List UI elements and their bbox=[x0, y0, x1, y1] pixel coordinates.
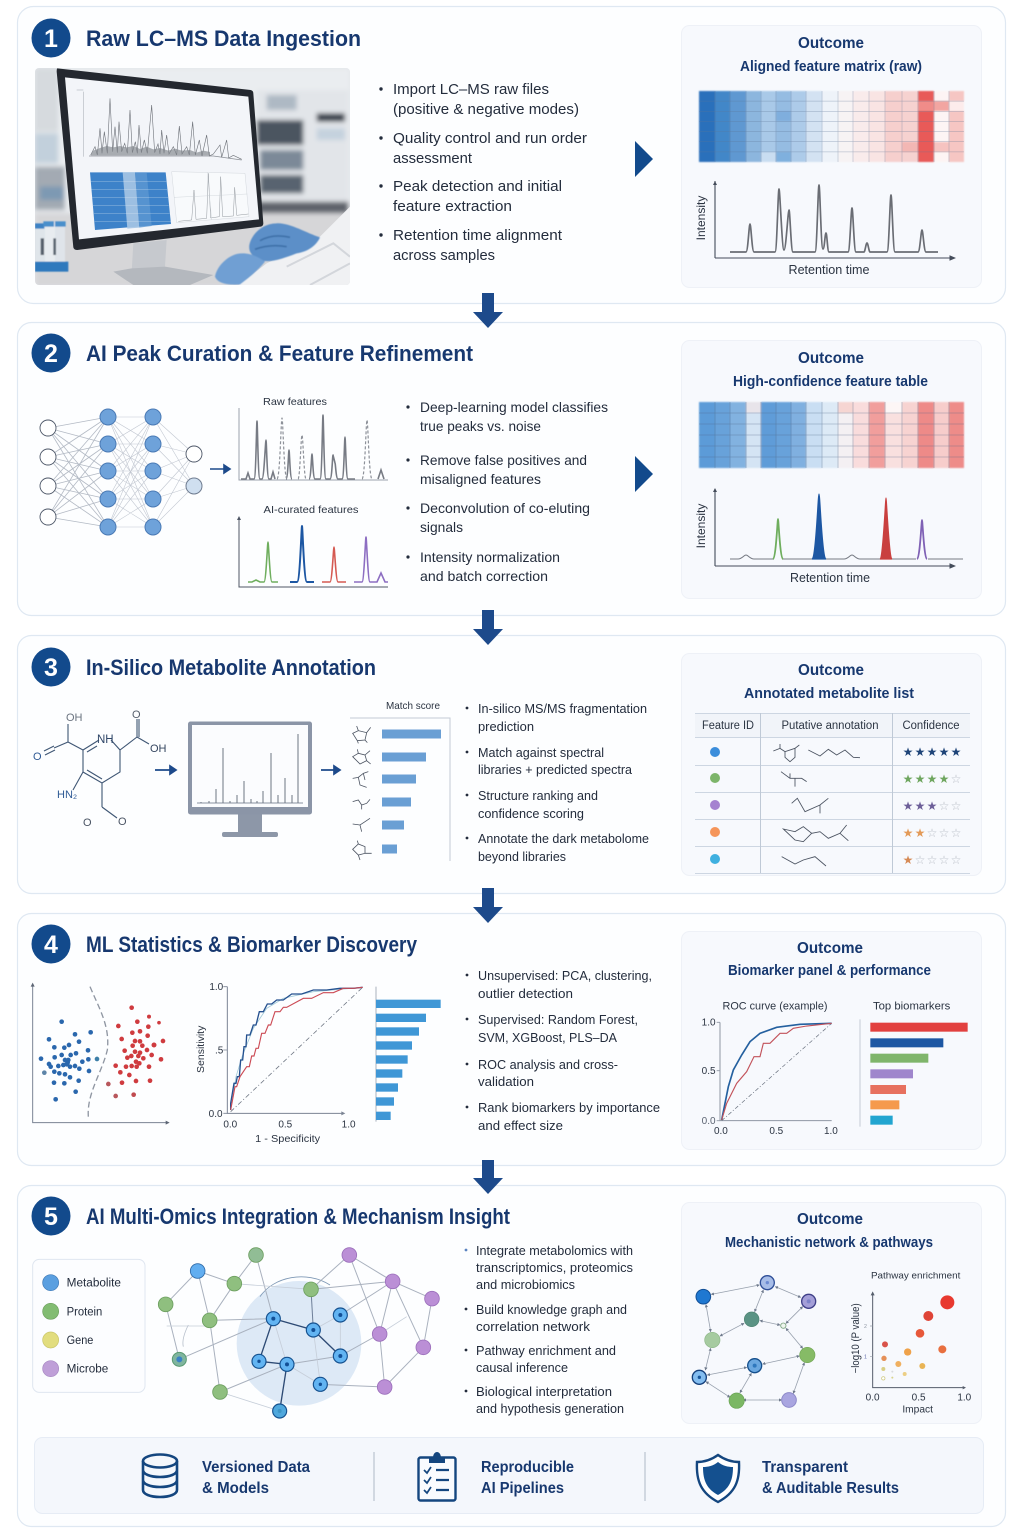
icon: monitor with spectrum bbox=[188, 722, 312, 837]
step number 3 bbox=[32, 648, 70, 686]
chart: ROC curve: 0.0 bbox=[223, 1120, 238, 1131]
chart: match score ranking bbox=[350, 700, 450, 861]
chart: ROC example: 0.0 bbox=[714, 1126, 728, 1137]
chart: ROC example: 1.0 bbox=[702, 1018, 716, 1029]
bullet list: step 4: and effect size bbox=[478, 1119, 563, 1133]
panel: outcome 1 bbox=[682, 26, 982, 288]
legend: node types: Protein bbox=[67, 1304, 102, 1318]
axis label: Intensity bbox=[694, 504, 708, 548]
bullet list: step 5 bbox=[465, 1244, 633, 1416]
chart: AI-curated features bbox=[237, 504, 388, 587]
arrow: to outcome 2 bbox=[635, 456, 653, 492]
legend: node types: Gene bbox=[67, 1333, 94, 1347]
arrow: step 1 to 2 bbox=[473, 293, 503, 328]
chart: pathway enrichment: 1.0 bbox=[957, 1393, 972, 1404]
panel: outcome 4 bbox=[682, 932, 982, 1150]
outcome heading: Outcome bbox=[797, 1211, 863, 1228]
panel: outcome 5 bbox=[682, 1202, 982, 1424]
table: annotated metabolites: ☆☆☆☆ bbox=[915, 853, 961, 867]
chart: raw features: Raw features bbox=[263, 396, 327, 408]
label: versioned data bbox=[202, 1459, 310, 1497]
table: annotated metabolites: ★★★★ bbox=[903, 772, 949, 786]
bullet list: step 3: beyond libraries bbox=[478, 850, 566, 864]
chart: ROC curve: 1.0 bbox=[209, 982, 224, 993]
bullet list: step 2: Deep-learning model classifies bbox=[420, 399, 608, 415]
arrow: step 3 to 4 bbox=[473, 888, 503, 923]
bullet list: step 4: Supervised: Random Forest, bbox=[478, 1013, 638, 1027]
bullet list: step 4: SVM, XGBoost, PLS–DA bbox=[478, 1031, 618, 1045]
diagram: molecule structure: NH bbox=[97, 734, 114, 746]
bullet list: step 1: Import LC–MS raw files bbox=[393, 82, 549, 98]
bullet list: step 2: Remove false positives and bbox=[420, 452, 587, 468]
chart: ROC example: 0.5 bbox=[702, 1066, 716, 1077]
outcome subheading: Aligned feature matrix (raw) bbox=[740, 59, 922, 75]
bullet list: step 2: true peaks vs. noise bbox=[420, 418, 541, 434]
chart: pathway enrichment: 1 bbox=[864, 1355, 867, 1361]
bullet list: step 2: signals bbox=[420, 519, 463, 535]
outcome subheading: Mechanistic network & pathways bbox=[725, 1235, 933, 1251]
chart: ROC example: 0.0 bbox=[702, 1116, 716, 1127]
arrow: to outcome 1 bbox=[635, 141, 653, 177]
icon: database bbox=[143, 1454, 177, 1497]
bullet list: step 5: transcriptomics, proteomics bbox=[476, 1261, 633, 1275]
bullet list: step 5: Pathway enrichment and bbox=[476, 1344, 616, 1358]
arrow: network to features bbox=[210, 465, 230, 473]
bullet list: step 4: ROC analysis and cross- bbox=[478, 1058, 618, 1072]
chart: AI-curated features: AI-curated features bbox=[264, 504, 358, 516]
chart: top biomarkers: Top biomarkers bbox=[873, 1000, 950, 1012]
axis label: Retention time bbox=[790, 571, 870, 585]
chart: PCA scatter bbox=[31, 983, 170, 1125]
heading: step 3: In-Silico Metabolite Annotation bbox=[86, 655, 376, 680]
panel: outcome 3 bbox=[682, 654, 982, 876]
outcome subheading: Biomarker panel & performance bbox=[728, 963, 931, 979]
screen bbox=[65, 77, 259, 239]
bullet list: step 5: Integrate metabolomics with bbox=[476, 1244, 633, 1258]
bullet list: step 5: Build knowledge graph and bbox=[476, 1303, 627, 1317]
step number 5 bbox=[32, 1196, 70, 1236]
bullet list: step 1: Peak detection and initial bbox=[393, 179, 562, 195]
coat bbox=[238, 207, 350, 285]
step number 2: 2 bbox=[44, 340, 58, 368]
table: annotated metabolites: Confidence bbox=[902, 720, 960, 732]
panel: step 4 ML statistics bbox=[18, 914, 1006, 1166]
bullet list: step 2: misaligned features bbox=[420, 471, 541, 487]
table: annotated metabolites: ☆☆ bbox=[939, 799, 961, 813]
bullet list: step 3: Annotate the dark metabolome bbox=[478, 832, 649, 846]
arrow: step 4 to 5 bbox=[473, 1160, 503, 1194]
illustration: scientist at monitor in lab bbox=[35, 68, 350, 287]
table: annotated metabolites: Putative annotation bbox=[782, 720, 878, 732]
step number 1: 1 bbox=[44, 25, 58, 53]
outcome heading: Outcome bbox=[798, 662, 864, 679]
bullet list: step 3: confidence scoring bbox=[478, 807, 584, 821]
bullet list: step 4 bbox=[466, 969, 660, 1133]
chart: pathway enrichment: 2 bbox=[864, 1324, 867, 1330]
chart: top biomarkers bbox=[860, 1000, 968, 1127]
chart: curated chromatogram bbox=[694, 488, 963, 585]
bullet list: step 2 bbox=[406, 399, 608, 584]
arrow: monitor to ranking bbox=[321, 766, 340, 774]
chart: match score ranking: Match score bbox=[386, 700, 440, 712]
diagram: mechanistic network bbox=[692, 1276, 816, 1408]
bullet list: step 3: Structure ranking and bbox=[478, 789, 598, 803]
step number 5: 5 bbox=[44, 1203, 58, 1231]
outcome subheading: High-confidence feature table bbox=[733, 374, 928, 390]
diagram: molecule structure: HN₂ bbox=[57, 789, 77, 801]
heading: step 2: AI Peak Curation & Feature Refinement bbox=[86, 341, 474, 366]
screen heatmap bbox=[90, 172, 171, 230]
diagram: multi-omics network bbox=[158, 1248, 439, 1418]
bullet list: step 1: feature extraction bbox=[393, 199, 512, 215]
bullet list: step 1: Retention time alignment bbox=[393, 228, 562, 244]
panel: step 5 multi-omics bbox=[18, 1186, 1006, 1526]
bullet list: step 3: In-silico MS/MS fragmentation bbox=[478, 702, 647, 716]
chart: ROC curve bbox=[196, 982, 363, 1145]
outcome heading: Outcome bbox=[797, 940, 863, 957]
bezel bbox=[57, 68, 263, 250]
label: reproducible pipelines: Reproducible bbox=[481, 1459, 574, 1476]
chart: biomarker importance bars bbox=[376, 987, 441, 1122]
label: transparent results: & Auditable Results bbox=[762, 1480, 899, 1497]
bullet list: step 1: across samples bbox=[393, 248, 495, 264]
chart: ROC curve: 0.0 bbox=[209, 1109, 223, 1120]
panel: step 3 annotation bbox=[18, 636, 1006, 894]
bullet list: step 5: causal inference bbox=[476, 1361, 568, 1375]
heatmap: feature table bbox=[699, 402, 964, 468]
label: transparent results: Transparent bbox=[762, 1459, 848, 1476]
bullet list: step 1: assessment bbox=[393, 151, 472, 167]
chart: pathway enrichment: 0.0 bbox=[866, 1393, 880, 1404]
label: versioned data: & Models bbox=[202, 1480, 269, 1497]
label: reproducible pipelines bbox=[481, 1459, 574, 1497]
mini structures bbox=[353, 726, 372, 860]
label: reproducible pipelines: AI Pipelines bbox=[481, 1480, 564, 1497]
panel: step 2 peak curation bbox=[18, 322, 1006, 616]
diagram: molecule structure bbox=[33, 709, 167, 829]
diagram: neural network bbox=[40, 409, 202, 535]
diagram: molecule structure: O bbox=[33, 751, 42, 763]
heatmap: aligned feature matrix bbox=[699, 91, 964, 162]
bullet list: step 3: prediction bbox=[478, 720, 534, 734]
bullet list: step 2: Intensity normalization bbox=[420, 549, 560, 565]
chart: pathway enrichment: 0.5 bbox=[912, 1393, 926, 1404]
table: annotated metabolites: ☆☆☆ bbox=[927, 826, 961, 840]
chart: pathway enrichment: Impact bbox=[902, 1405, 933, 1416]
chart: ROC curve: 0.5 bbox=[278, 1120, 293, 1131]
outcome heading: Outcome bbox=[798, 350, 864, 367]
panel: footer principles bbox=[34, 1438, 984, 1514]
bullet list: step 2: and batch correction bbox=[420, 568, 548, 584]
step number 4 bbox=[32, 924, 70, 964]
chart: ROC example bbox=[702, 1000, 838, 1137]
bullet list: step 4: outlier detection bbox=[478, 987, 573, 1001]
step number 3: 3 bbox=[44, 654, 58, 682]
diagram: molecule structure: O bbox=[83, 817, 92, 829]
axis label: Intensity bbox=[694, 196, 708, 240]
stand bbox=[132, 240, 166, 268]
screen line chart bbox=[172, 172, 249, 223]
step number 4: 4 bbox=[44, 931, 58, 959]
axis label: Retention time bbox=[788, 263, 870, 277]
chart: ROC example: 0.5 bbox=[769, 1126, 784, 1137]
chart: ROC curve: Sensitivity bbox=[196, 1025, 207, 1073]
step number 2 bbox=[32, 334, 70, 372]
bullet list: step 5: Biological interpretation bbox=[476, 1385, 612, 1399]
bullet list: step 4: validation bbox=[478, 1075, 534, 1089]
spectrum bbox=[89, 156, 242, 160]
bullet list: step 3: libraries + predicted spectra bbox=[478, 763, 632, 777]
chart: ROC curve: .5 bbox=[215, 1045, 224, 1056]
table: annotated metabolites bbox=[695, 713, 970, 874]
step number 1 bbox=[32, 18, 70, 58]
heading: step 1: Raw LC–MS Data Ingestion bbox=[86, 26, 361, 51]
table: annotated metabolites: ★★★★★ bbox=[903, 745, 961, 759]
table: annotated metabolites: ☆ bbox=[951, 772, 961, 786]
table: annotated metabolites: ★ bbox=[903, 853, 913, 867]
chart: raw chromatogram bbox=[694, 181, 955, 277]
bullet list: step 5: and hypothesis generation bbox=[476, 1402, 624, 1416]
bullet list: step 3: Match against spectral bbox=[478, 746, 604, 760]
chart: ROC curve: 1 - Specificity bbox=[255, 1134, 321, 1145]
label: transparent results bbox=[762, 1459, 899, 1497]
arrow: molecule to monitor bbox=[155, 766, 176, 774]
legend: node types bbox=[33, 1259, 145, 1392]
diagram: molecule structure: OH bbox=[150, 743, 167, 755]
arrow: step 2 to 3 bbox=[473, 610, 503, 645]
chart: pathway enrichment bbox=[850, 1270, 972, 1416]
icon: shield bbox=[697, 1455, 739, 1502]
table: annotated metabolites: ★★★ bbox=[903, 799, 937, 813]
legend: node types: Microbe bbox=[67, 1362, 109, 1376]
diagram: molecule structure: O bbox=[118, 816, 127, 828]
chart: pathway enrichment: −log10 (P value) bbox=[850, 1303, 862, 1373]
legend: node types: Metabolite bbox=[67, 1276, 121, 1290]
bullet list: step 5: and microbiomics bbox=[476, 1278, 575, 1292]
bullet list: step 4: Unsupervised: PCA, clustering, bbox=[478, 969, 652, 983]
gloves bbox=[215, 223, 320, 285]
diagram: molecule structure: OH bbox=[66, 712, 83, 724]
outcome heading: Outcome bbox=[798, 35, 864, 52]
chart: ROC example: ROC curve (example) bbox=[722, 1000, 827, 1012]
bullet list: step 4: Rank biomarkers by importance bbox=[478, 1101, 660, 1115]
bullet list: step 2: Deconvolution of co-eluting bbox=[420, 500, 590, 516]
table: annotated metabolites: Feature ID bbox=[702, 720, 754, 732]
table: annotated metabolites: ★★ bbox=[903, 826, 925, 840]
chart: pathway enrichment: Pathway enrichment bbox=[871, 1270, 961, 1280]
bullet list: step 1: (positive & negative modes) bbox=[393, 102, 579, 118]
outcome subheading: Annotated metabolite list bbox=[744, 686, 914, 702]
label: versioned data: Versioned Data bbox=[202, 1459, 310, 1476]
heading: step 4: ML Statistics & Biomarker Discovery bbox=[86, 932, 418, 957]
bullet list: step 1 bbox=[379, 82, 587, 264]
chart: raw features bbox=[239, 396, 388, 480]
panel: outcome 2 bbox=[682, 340, 982, 598]
panel: step 1 raw data ingestion bbox=[18, 6, 1006, 304]
heading: step 5: AI Multi-Omics Integration & Mechanism Insight bbox=[86, 1204, 511, 1229]
chart: ROC curve: 1.0 bbox=[342, 1120, 356, 1131]
bullet list: step 3 bbox=[466, 702, 649, 864]
diagram: molecule structure: O bbox=[132, 709, 141, 721]
icon: clipboard checklist bbox=[418, 1452, 456, 1500]
chart: ROC example: 1.0 bbox=[824, 1126, 838, 1137]
bullet list: step 1: Quality control and run order bbox=[393, 131, 587, 147]
bullet list: step 5: correlation network bbox=[476, 1320, 591, 1334]
